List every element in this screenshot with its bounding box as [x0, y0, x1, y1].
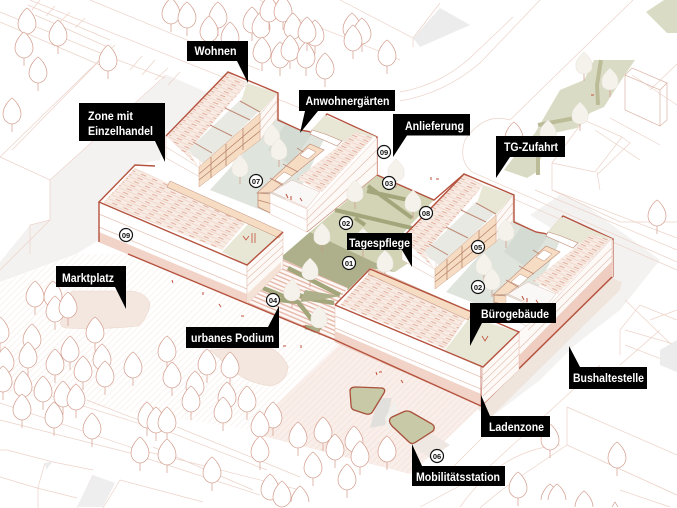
podium paths	[263, 268, 340, 330]
label: Mobilitätsstation: Mobilitätsstation	[416, 472, 500, 484]
number markers: 06	[433, 452, 441, 461]
number markers: 02	[474, 283, 482, 292]
number markers: 08	[422, 209, 430, 218]
label: Marktplatz	[56, 266, 126, 309]
residential complex north-west	[166, 72, 377, 232]
plaza hatched ground	[0, 254, 481, 470]
residential complex south-east	[402, 174, 613, 334]
label: Bürogebäude	[470, 303, 556, 346]
green strip paths	[538, 60, 601, 175]
label: urbanes Podium: urbanes Podium	[191, 333, 274, 345]
label: TG-Zufahrt: TG-Zufahrt	[504, 142, 558, 154]
pink station forecourt	[263, 344, 481, 474]
label: Wohnen: Wohnen	[194, 46, 236, 58]
mobility station roofs	[350, 387, 450, 458]
building: retail block west	[99, 165, 283, 304]
marketplace patch	[61, 291, 150, 329]
number markers: 01	[345, 259, 353, 268]
grey ground shadow: west street	[0, 75, 225, 282]
label: Anlieferung: Anlieferung	[405, 121, 464, 133]
number markers	[120, 146, 484, 462]
label: Anwohnergärten	[299, 90, 395, 133]
number markers: 03	[385, 179, 393, 188]
white trees in the northeast strip	[540, 52, 618, 149]
number markers: 09	[380, 148, 388, 157]
label: Zone mit Einzelhandel	[79, 103, 165, 162]
label: Wohnen	[187, 41, 248, 83]
lawn podium	[280, 232, 395, 290]
red outline: garden edge	[377, 174, 464, 200]
label: Bushaltestelle	[569, 346, 647, 389]
label: Mobilitätsstation	[412, 444, 505, 486]
label: urbanes Podium	[186, 306, 279, 348]
label: TG-Zufahrt	[496, 136, 565, 178]
number markers: 07	[252, 177, 260, 186]
label: Ladenzone	[481, 395, 550, 437]
label: Tagespflege	[347, 233, 412, 267]
label: Marktplatz: Marktplatz	[62, 273, 114, 285]
grey ground shadow: east street	[470, 195, 660, 418]
podium patch	[210, 345, 288, 386]
trees in courtyards and garden	[232, 124, 514, 335]
label: Bushaltestelle: Bushaltestelle	[573, 373, 644, 385]
number markers: 09	[122, 231, 130, 240]
label: Tagespflege: Tagespflege	[349, 238, 410, 250]
green corner in the northeast	[646, 0, 677, 33]
building: office block south-east	[335, 268, 519, 406]
number markers: 04	[269, 296, 278, 305]
label: Zone mit Einzelhandel: Einzelhandel	[88, 126, 153, 138]
small red figures on plaza	[172, 95, 594, 383]
label: Anlieferung	[393, 114, 470, 157]
stepped urban podium	[248, 258, 348, 340]
label: Bürogebäude: Bürogebäude	[481, 309, 549, 321]
south-east facade and retail band	[478, 238, 622, 418]
garden paths	[335, 186, 412, 228]
label: Anwohnergärten: Anwohnergärten	[306, 96, 390, 108]
garden between buildings	[310, 175, 434, 272]
number markers: 05	[474, 243, 482, 252]
green strip in the northeast	[504, 60, 635, 178]
number markers: 02	[342, 219, 350, 228]
label: Zone mit Einzelhandel: Zone mit	[88, 111, 133, 123]
label: Ladenzone: Ladenzone	[489, 422, 544, 434]
